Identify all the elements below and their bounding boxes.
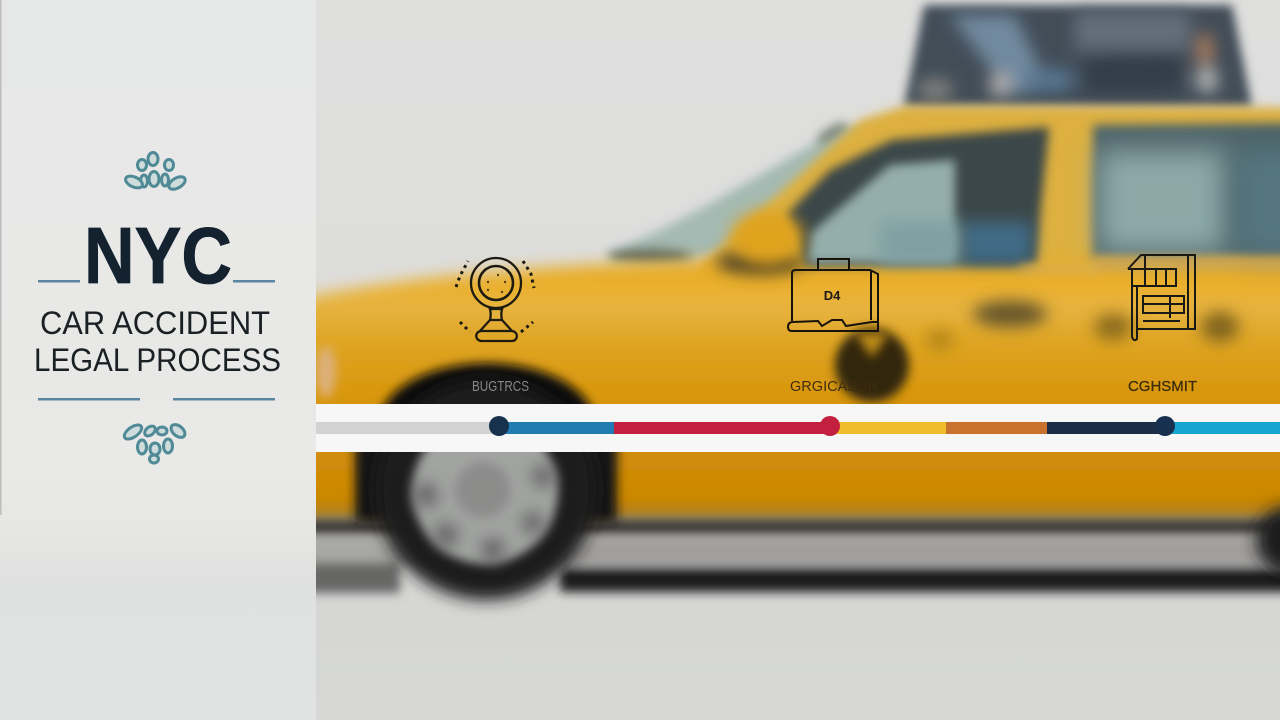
track: navy segment: [1047, 422, 1165, 434]
rule: title right: [233, 280, 275, 282]
taxi side windows: [786, 122, 1280, 273]
icon: top ornament: [124, 152, 187, 192]
icon: step 2 briefcase: [788, 259, 878, 331]
icon: step 2 briefcase: D4: [824, 288, 841, 303]
rule: lower right: [173, 398, 275, 400]
rule: lower left: [38, 398, 140, 400]
subtitle: car accident legal process: CAR ACCIDENT: [40, 305, 270, 341]
track: red segment: [614, 422, 830, 434]
front wheel: [355, 363, 1280, 600]
marker: step 3: [1155, 416, 1175, 436]
taxi body: [300, 260, 1280, 521]
icon: step 3 document: [1128, 255, 1195, 340]
label: step 2: GRGICABUR: [790, 378, 878, 395]
label: step 3: CGHSMIT: [1128, 378, 1197, 395]
marker: step 2: [820, 416, 840, 436]
track: orange segment: [946, 422, 1047, 434]
taxi roof: [700, 106, 1280, 300]
road and shadow: [300, 519, 1280, 593]
title: NYC: NYC: [84, 211, 232, 300]
subtitle: car accident legal process: [34, 305, 281, 378]
subtitle: car accident legal process: LEGAL PROCESS: [34, 342, 281, 378]
track: blue segment: [499, 422, 614, 434]
track: yellow segment: [830, 422, 946, 434]
icon: step 1 magnifier stamp: [456, 258, 534, 341]
mirror and door details: [316, 211, 1239, 402]
label: step 1: BUGTRCS: [472, 378, 529, 395]
track: cyan segment: [1165, 422, 1280, 434]
roof sign: [904, 5, 1252, 107]
timeline band: [316, 404, 1280, 452]
panel: title sidebar: [0, 0, 316, 720]
track: grey segment: [316, 422, 494, 434]
taxi windshield strip: [606, 119, 875, 268]
icon: bottom ornament: [122, 422, 187, 463]
marker: step 1: [489, 416, 509, 436]
rule: title left: [38, 280, 80, 282]
